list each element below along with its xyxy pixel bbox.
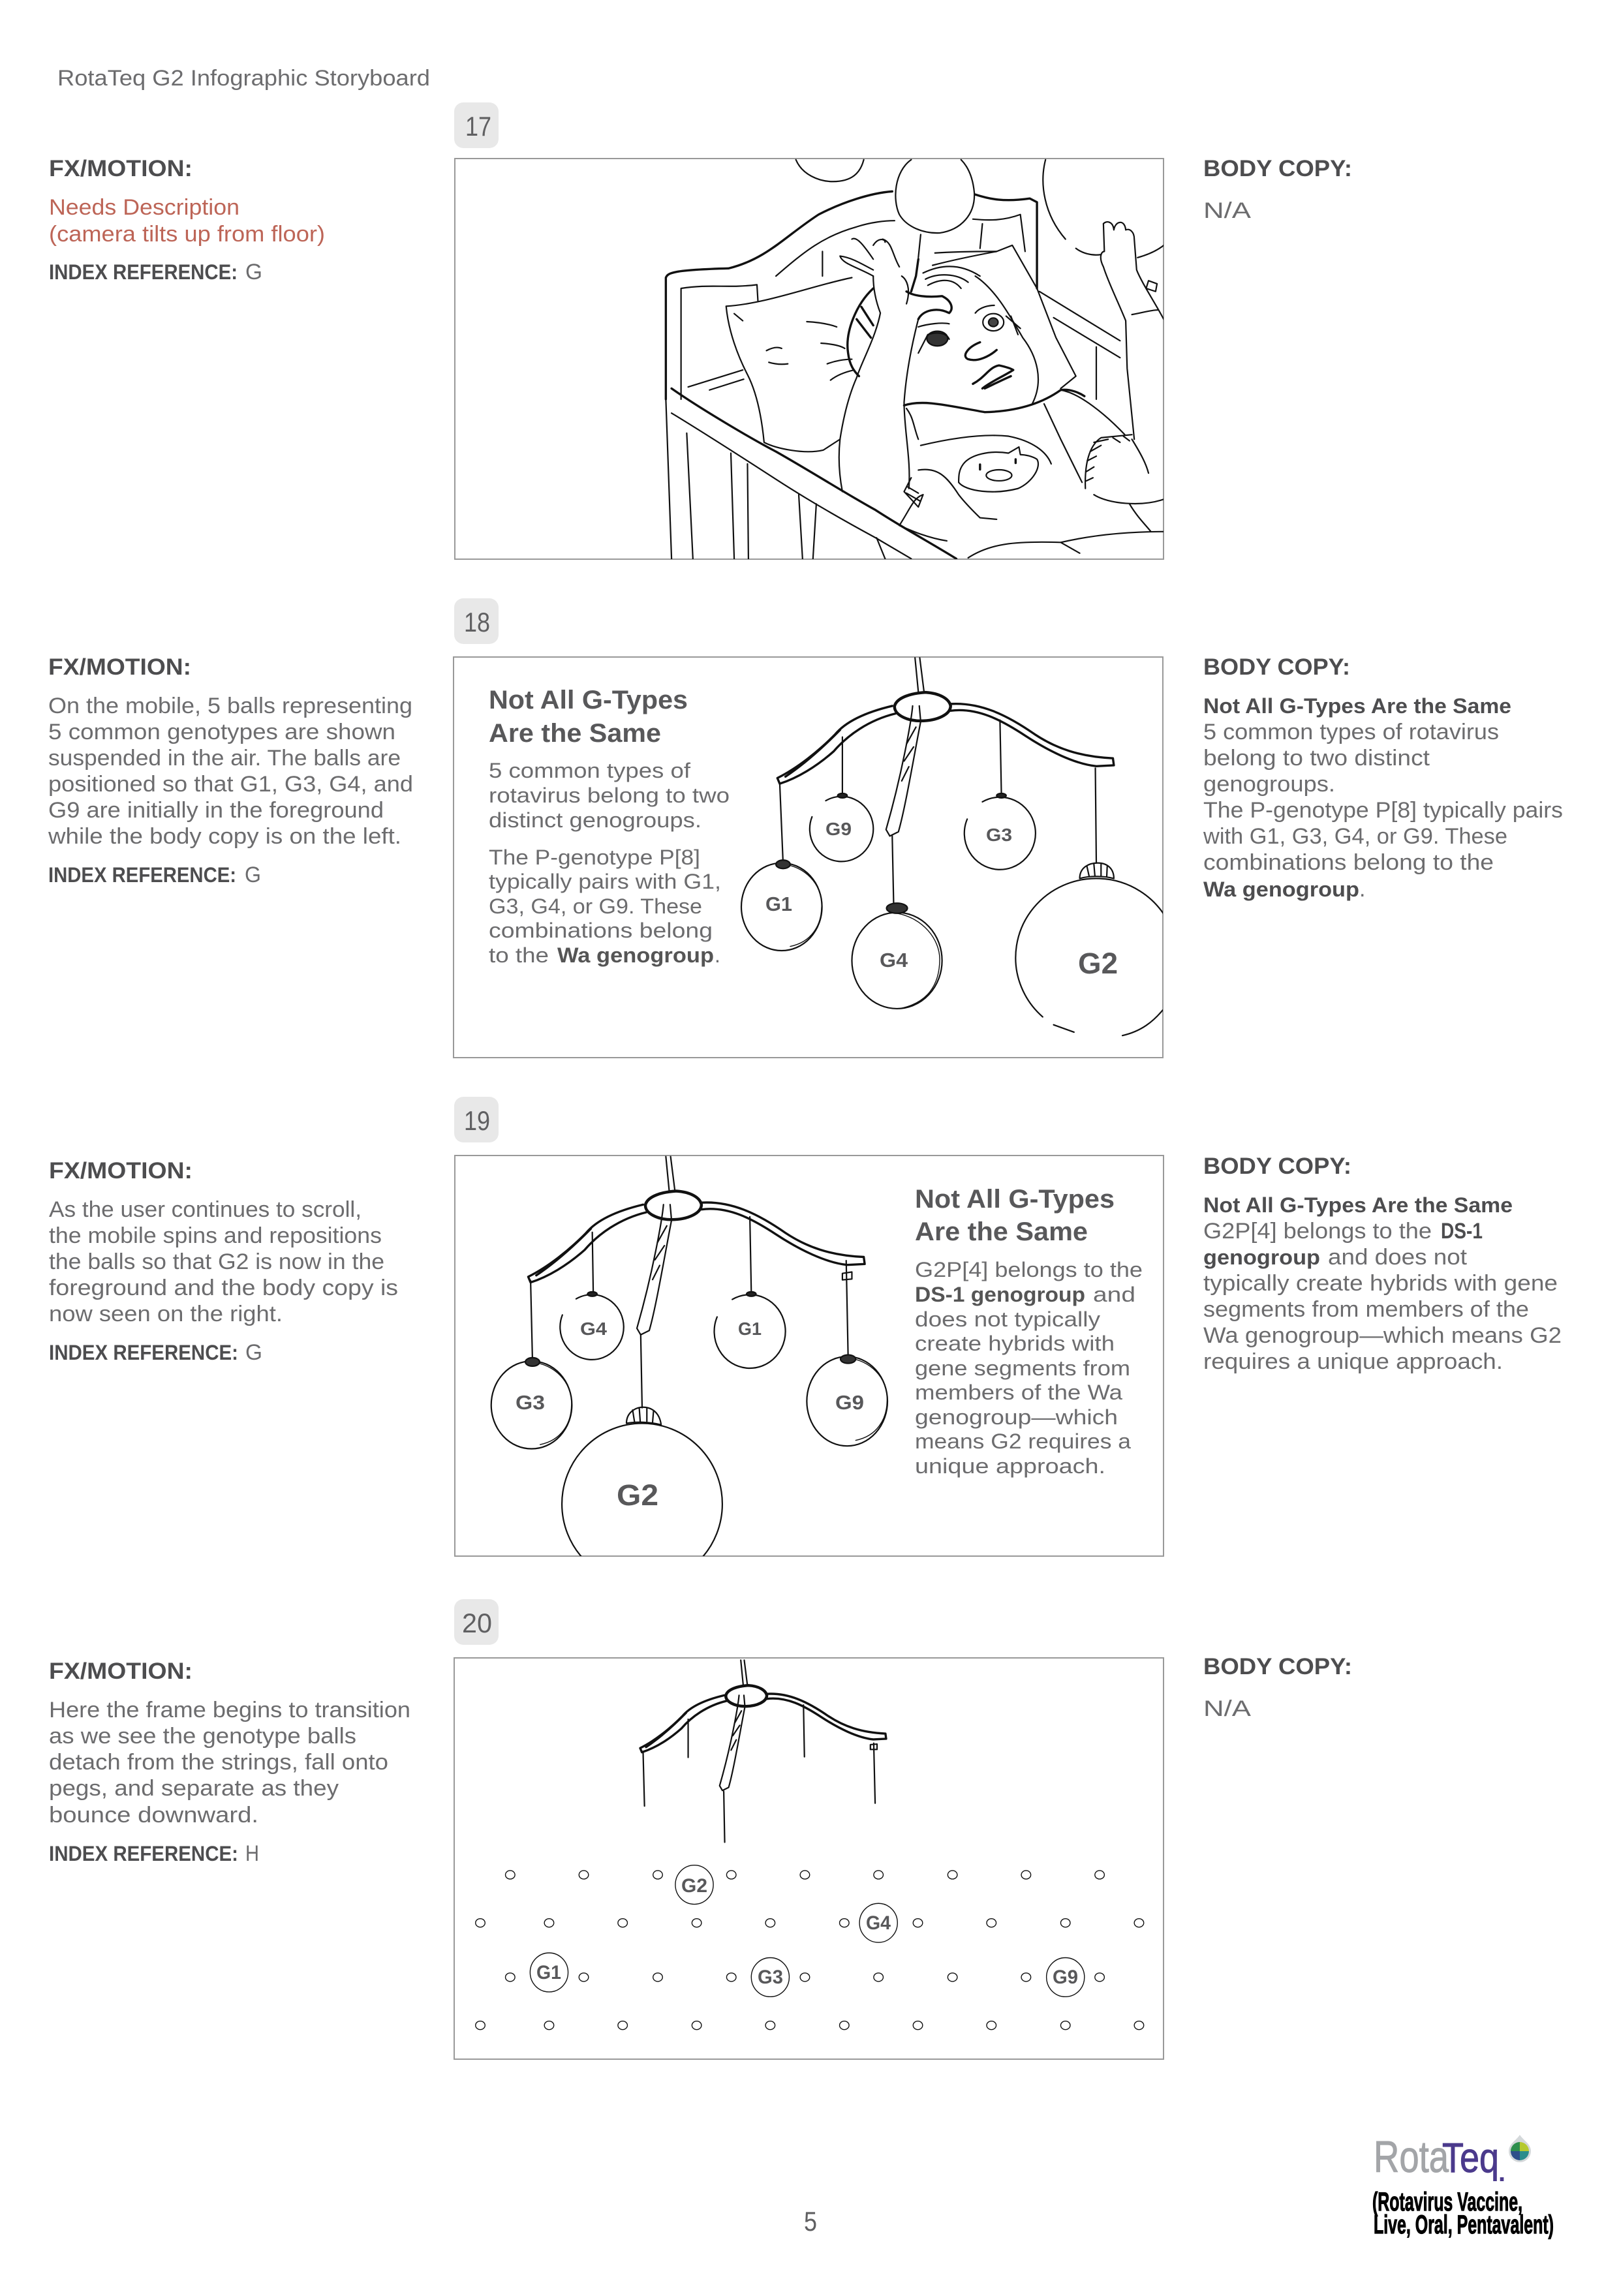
body copy notes scene 18 [1203,654,1563,902]
ball labels: G2 [681,1875,707,1897]
FX/motion notes scene 17: FX/MOTION: [49,156,193,181]
FX/motion notes scene 20: pegs, and separate as they [49,1776,339,1801]
FX/motion notes scene 17: INDEX REFERENCE: [49,260,238,284]
ball labels: G4 [866,1912,891,1934]
frame body copy: typically pairs with G1, [489,870,721,893]
body copy notes scene 18: Not All G-Types Are the Same [1203,694,1511,718]
FX/motion notes scene 19 [49,1158,398,1365]
FX/motion notes scene 20: FX/MOTION: [49,1659,193,1684]
FX/motion notes scene 19: now seen on the right. [49,1302,283,1326]
scene number badge 18 [454,598,499,644]
frame body copy: to the [489,943,549,967]
frame body copy: means G2 requires a [915,1430,1131,1453]
body copy notes scene 19: BODY COPY: [1203,1154,1351,1179]
frame body copy: . [715,943,720,967]
FX/motion notes scene 18: On the mobile, 5 balls representing [48,694,412,718]
body copy notes scene 18: combinations belong to the [1203,850,1494,875]
FX/motion notes scene 18: FX/MOTION: [48,654,191,680]
frame heading: Are the Same [489,719,661,748]
FX/motion notes scene 17 [49,156,325,284]
mobile illustration [491,1157,887,1585]
body copy notes scene 19 [1203,1154,1562,1374]
ball labels [516,1319,864,1512]
scene number badge 17 [454,102,499,148]
FX/motion notes scene 17: G [245,260,262,284]
frame body copy: G3, G4, or G9. These [489,895,702,918]
storyboard frame 17: baby in crib looking up at mobile [455,159,1164,559]
FX/motion notes scene 19: the balls so that G2 is now in the [49,1249,384,1274]
scene number badge 20 [454,1599,499,1645]
scene 19 row [49,1097,1562,1585]
FX/motion notes scene 18: 5 common genotypes are shown [48,720,395,744]
frame body copy: and [1093,1283,1135,1306]
body copy notes scene 18: genogroups. [1203,772,1335,797]
scene 18 row [48,598,1563,1058]
FX/motion notes scene 20 [49,1659,410,1866]
frame body copy: rotavirus belong to two [489,784,730,807]
FX/motion notes scene 18: suspended in the air. The balls are [48,746,401,771]
ball labels: G1 [738,1319,762,1339]
body copy notes scene 19: DS-1 [1441,1219,1483,1244]
baby raised arm and hand [839,239,918,491]
body copy notes scene 20 [1203,1654,1352,1721]
frame heading: Not All G-Types [915,1185,1115,1214]
FX/motion notes scene 19: the mobile spins and repositions [49,1223,382,1248]
second baby hand [1101,222,1164,439]
FX/motion notes scene 18: INDEX REFERENCE: [48,863,236,887]
mobile arms and hub [528,1157,865,1335]
frame heading: Not All G-Types [489,686,688,714]
pillow [688,277,854,452]
RotaTeq logo: . [1498,2158,1505,2187]
frame body copy: DS-1 genogroup [915,1283,1085,1306]
body copy notes scene 18: The P-genotype P[8] typically pairs [1203,798,1563,823]
scene number badge 20: 20 [462,1608,492,1638]
frame heading [915,1185,1115,1246]
frame body copy: The P-genotype P[8] [489,846,700,869]
RotaTeq logo: (Rotavirus Vaccine, [1372,2188,1522,2216]
body copy notes scene 18: BODY COPY: [1203,654,1350,680]
FX/motion notes scene 17: (camera tilts up from floor) [49,222,325,247]
body copy notes scene 19: Wa genogroup—which means G2 [1203,1323,1562,1348]
frame heading [489,686,688,748]
crib headboard [666,191,1037,399]
ball labels [765,819,1118,980]
scene number badge 17: 17 [465,111,491,142]
body copy notes scene 18: with G1, G3, G4, or G9. These [1203,824,1507,849]
frame body copy [915,1258,1143,1478]
body copy notes scene 19: G2P[4] belongs to the [1203,1219,1432,1244]
frame body copy: create hybrids with [915,1332,1115,1355]
ball labels: G2 [1078,947,1118,980]
body copy notes scene 18: belong to two distinct [1203,746,1430,771]
FX/motion notes scene 18: G [245,863,261,887]
FX/motion notes scene 18: positioned so that G1, G3, G4, and [48,772,413,797]
body copy notes scene 18: 5 common types of rotavirus [1203,720,1499,744]
page title: RotaTeq G2 Infographic Storyboard [57,66,430,91]
FX/motion notes scene 19: FX/MOTION: [49,1158,193,1184]
scene number badge 19 [454,1097,499,1142]
body copy notes scene 19: Not All G-Types Are the Same [1203,1193,1513,1217]
RotaTeq logo [1372,2132,1554,2239]
frame body copy: unique approach. [915,1454,1105,1478]
FX/motion notes scene 20: INDEX REFERENCE: [49,1842,238,1865]
frame body copy: combinations belong [489,919,713,942]
body copy notes scene 20: BODY COPY: [1203,1654,1352,1679]
FX/motion notes scene 19: As the user continues to scroll, [49,1197,362,1222]
balls [491,1292,887,1585]
frame body copy: distinct genogroups. [489,808,702,832]
ball labels: G3 [758,1967,783,1988]
frame body copy: Wa genogroup [557,943,714,967]
frame body copy: gene segments from [915,1356,1130,1380]
scene number badge 18: 18 [464,607,490,637]
ball labels: G1 [536,1962,561,1983]
FX/motion notes scene 18 [48,654,413,887]
frame body copy: G2P[4] belongs to the [915,1258,1143,1281]
frame body copy: genogroup—which [915,1405,1118,1429]
mobile illustration [741,658,1177,1035]
frame body copy: members of the Wa [915,1381,1122,1404]
peg grid [476,1871,1144,2030]
scene number badge 19: 19 [464,1105,490,1136]
mobile balls overhead [796,160,1164,258]
body copy notes scene 19: requires a unique approach. [1203,1349,1503,1374]
frame body copy [489,759,730,967]
frame body copy: does not typically [915,1308,1100,1331]
balls [741,793,1177,1035]
ball labels: G9 [825,819,852,839]
ball labels [536,1875,1078,1988]
strings [780,720,1096,904]
body copy notes scene 17 [1203,156,1352,223]
storyboard frame 19: mobile with G2 in foreground, body copy on right [455,1156,1164,1585]
FX/motion notes scene 18: while the body copy is on the left. [48,824,401,849]
body copy notes scene 18: Wa genogroup [1203,878,1359,901]
falling genotype balls [530,1865,1085,1997]
body copy notes scene 19: segments from members of the [1203,1297,1529,1322]
body copy notes scene 19: genogroup [1203,1246,1320,1269]
ball labels: G4 [880,949,908,972]
FX/motion notes scene 19: foreground and the body copy is [49,1276,398,1300]
ball labels: G1 [765,893,792,915]
FX/motion notes scene 20: bounce downward. [49,1803,258,1828]
FX/motion notes scene 20: as we see the genotype balls [49,1724,356,1749]
storyboard frame 18: mobile with body copy on left [454,657,1177,1058]
FX/motion notes scene 19: INDEX REFERENCE: [49,1341,238,1364]
FX/motion notes scene 20: detach from the strings, fall onto [49,1750,388,1775]
storyboard frame 20: balls falling onto pegs [454,1658,1164,2059]
body copy notes scene 19: typically create hybrids with gene [1203,1271,1558,1296]
ball labels: G9 [1053,1967,1078,1988]
ball labels: G3 [516,1391,545,1414]
mobile arms and hub [777,658,1114,836]
FX/motion notes scene 20: H [245,1841,259,1866]
frame heading: Are the Same [915,1217,1088,1246]
shirt with pig print [899,390,1164,558]
RotaTeq logo: Rota [1374,2132,1449,2182]
scene 20 row [49,1599,1352,2059]
FX/motion notes scene 20: Here the frame begins to transition [49,1698,410,1722]
FX/motion notes scene 17: Needs Description [49,195,239,220]
FX/motion notes scene 18: G9 are initially in the foreground [48,798,384,823]
crib rail and slats [666,292,1120,559]
scene 17 row [49,102,1352,559]
RotaTeq logo: Teq [1442,2134,1499,2181]
body copy notes scene 20: N/A [1203,1696,1251,1721]
ball labels: G2 [617,1478,658,1512]
body copy notes scene 17: BODY COPY: [1203,156,1352,181]
empty mobile with detached strings [640,1661,886,1843]
strings [531,1217,852,1408]
body copy notes scene 17: N/A [1203,198,1251,223]
ball labels: G3 [986,825,1012,845]
baby head and face [848,245,1076,404]
icon: coloured droplet [1509,2135,1531,2162]
page number: 5 [804,2206,817,2237]
ball labels: G9 [835,1391,864,1414]
FX/motion notes scene 19: G [245,1340,262,1365]
frame body copy: 5 common types of [489,759,690,782]
body copy notes scene 19: and does not [1328,1245,1468,1270]
body copy notes scene 18: . [1359,877,1365,902]
ball labels: G4 [580,1319,607,1339]
